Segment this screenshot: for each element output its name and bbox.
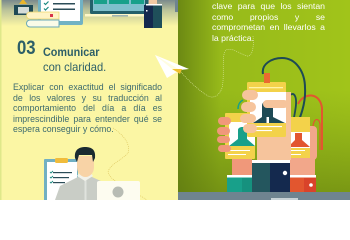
left hand with badge bbox=[217, 113, 255, 192]
green lanyard bbox=[238, 100, 243, 109]
right green panel bbox=[175, 0, 350, 192]
heading bbox=[43, 45, 106, 74]
left yellow panel bbox=[0, 0, 178, 200]
dark lanyard bbox=[263, 58, 305, 130]
illustration: person with clipboard and laptop bbox=[44, 147, 140, 203]
head bbox=[77, 156, 94, 177]
icon: laptop bbox=[85, 0, 148, 16]
text block: right column bbox=[212, 1, 325, 42]
icon: paper plane bbox=[155, 55, 189, 78]
text block: right column: como propios y se bbox=[212, 12, 325, 22]
centre hand with badge bbox=[240, 73, 291, 192]
text block: explanation: espera conseguir y cómo. bbox=[13, 124, 114, 134]
icon: person arm at desk bbox=[144, 0, 162, 28]
laptop bbox=[97, 181, 140, 203]
orange lanyard bbox=[298, 95, 322, 150]
icon: books bbox=[27, 12, 59, 27]
text block: explanation: Explicar con exactitud el significado bbox=[13, 82, 162, 92]
bottom grey bar bbox=[178, 192, 350, 200]
icon: trophy bbox=[14, 0, 33, 15]
shirt bbox=[55, 174, 116, 200]
text block: explanation: de los valores y su traducción al bbox=[13, 92, 162, 102]
clipboard bbox=[44, 158, 78, 202]
text block: explanation: imprescindible para entender qué se bbox=[13, 114, 162, 124]
text block: explanation bbox=[13, 82, 162, 134]
text block: right column: clave para que los sientan bbox=[212, 1, 325, 11]
text block: right column: la práctica. bbox=[212, 32, 254, 42]
icon: clipboard and checklist bbox=[38, 0, 83, 25]
text block: right column: comprometan en llevarlos a bbox=[212, 22, 325, 32]
heading: con claridad. bbox=[43, 60, 106, 74]
right hand with badge bbox=[285, 117, 317, 192]
heading: Comunicar bbox=[43, 45, 99, 59]
text block: explanation: comportamiento del día a día es bbox=[13, 103, 162, 113]
dotted flight path right bbox=[181, 36, 253, 97]
heading number: 03 bbox=[17, 38, 36, 59]
illustration: hands holding ID badges bbox=[217, 58, 322, 192]
dotted flight path left bbox=[108, 128, 147, 200]
